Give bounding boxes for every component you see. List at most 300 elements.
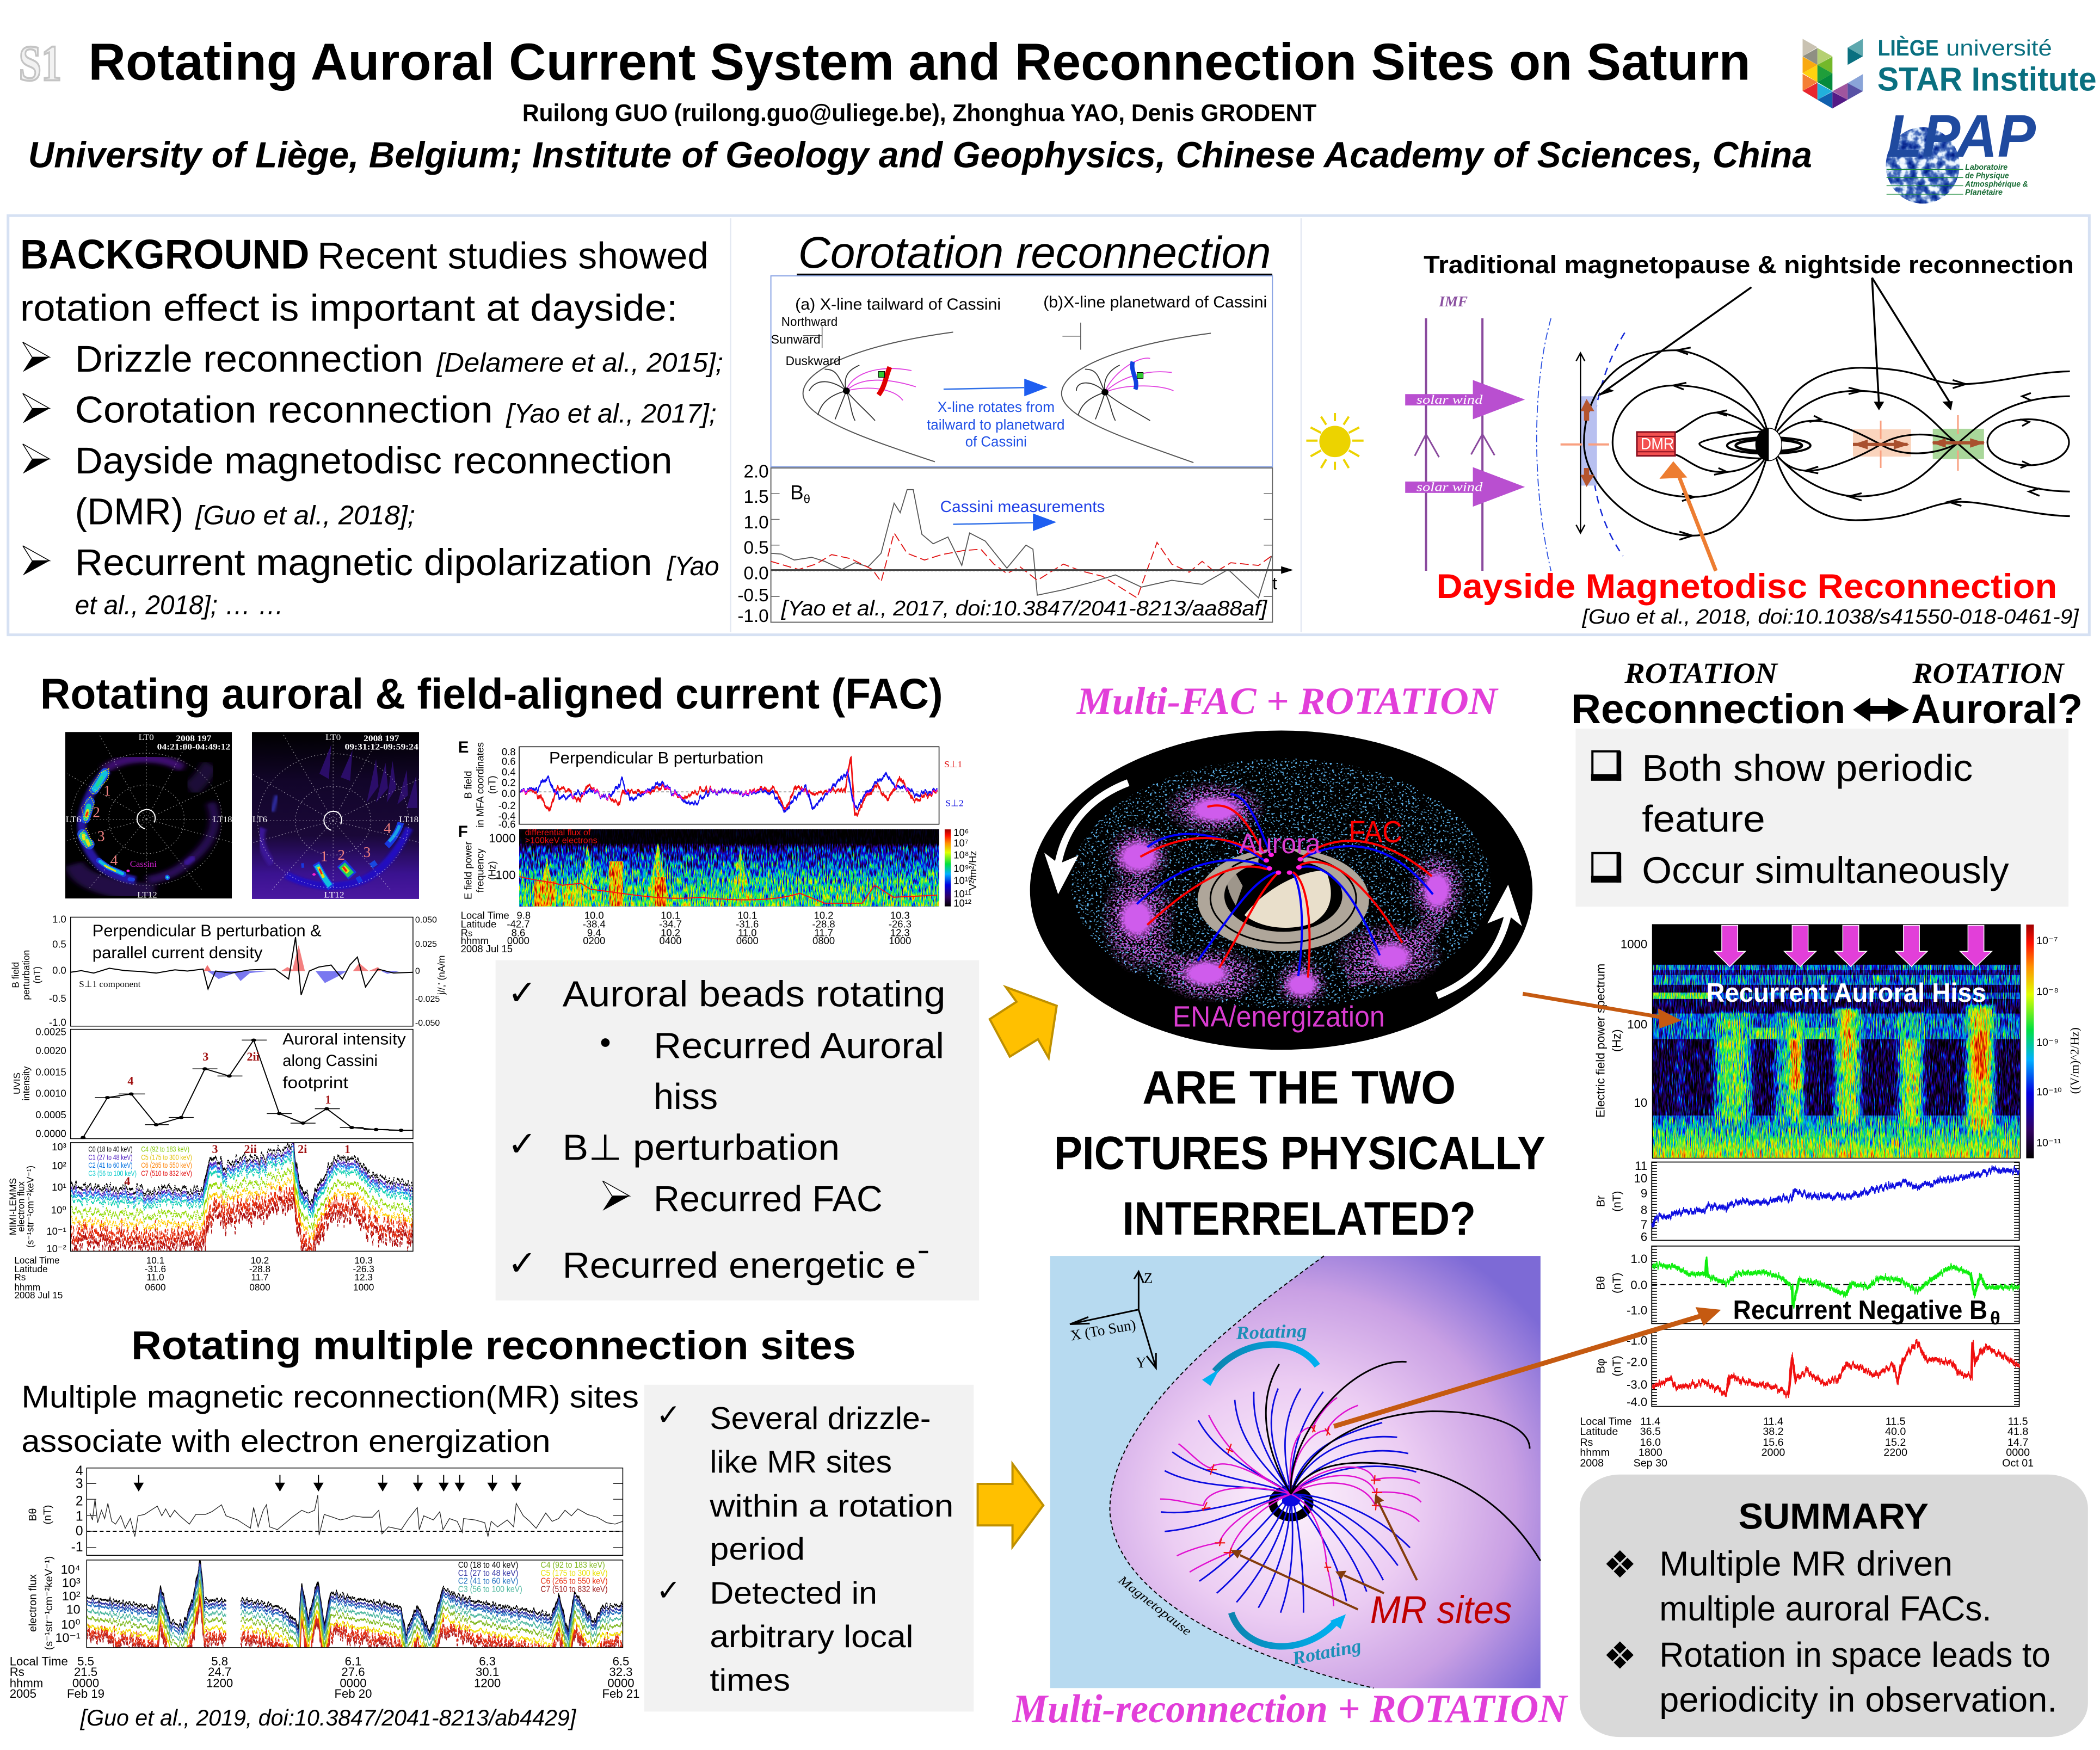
item: periodic feature: feature: [1642, 798, 1765, 840]
ephemeris table left: 10.3: [354, 1255, 373, 1266]
ticks B theta right: 1.0: [1630, 1252, 1647, 1266]
ephemeris table right: Local Time: [1580, 1416, 1632, 1428]
finding: arbitrary local times: times: [710, 1663, 790, 1698]
label: Rotating top: Rotating: [1235, 1321, 1307, 1344]
ephemeris table F: 0600: [736, 935, 759, 946]
ephemeris table lower left: 0000: [340, 1676, 367, 1690]
finding: arbitrary local times: Detected in: [710, 1576, 877, 1611]
label: Magnetopause: Magnetopause: [1115, 1573, 1194, 1638]
summary item 1: Multiple MR driven: [1659, 1544, 1953, 1583]
central question: PICTURES PHYSICALLY: [1054, 1127, 1545, 1180]
ticks Br: 6: [1641, 1230, 1647, 1243]
ticks B theta right: [1627, 1252, 1647, 1317]
sub-finding: auroral hiss: hiss: [654, 1077, 718, 1117]
diagram: multi-reconnection magnetosphere: [1050, 1256, 1541, 1688]
aurora right labels: LT6: [253, 815, 267, 824]
summary item 1: multiple auroral FACs.: [1659, 1589, 1992, 1628]
ephemeris table right: 2008: [1580, 1457, 1604, 1469]
ephemeris table F: -38.4: [583, 918, 606, 929]
chart: B phi: [1594, 1329, 2019, 1409]
ephemeris table right: 40.0: [1885, 1426, 1906, 1438]
ticks MIMI: 10⁰: [51, 1204, 66, 1216]
logo: LPAP: Planétaire: [1965, 188, 2003, 197]
colorbar labels F: 10⁹: [953, 862, 969, 874]
ephemeris table F: 10.2: [661, 927, 680, 938]
ticks UVIS: 0.0005: [35, 1109, 66, 1120]
background intro line 2: rotation effect is important at dayside:: [20, 287, 678, 329]
y label MIMI: MIMI-LEMMS: [8, 1178, 19, 1235]
aurora right bead numbers: 4: [384, 820, 391, 836]
chart: recurrent auroral hiss: [1593, 925, 2081, 1159]
ephemeris table left: 10.2: [251, 1255, 269, 1266]
legend flux: C1 (27 to 48 keV): [458, 1569, 518, 1578]
finding: drizzle-like sites: period: [710, 1532, 805, 1567]
ephemeris table left: -26.3: [353, 1264, 374, 1274]
ephemeris table lower left: 1200: [474, 1676, 501, 1690]
bullet: drizzle: [Delamere et al., 2015];: [436, 348, 723, 378]
aurora left bead numbers: 4: [110, 852, 118, 868]
y label Br: [1594, 1191, 1623, 1212]
chart: Br: [1594, 1159, 2019, 1243]
finding: energetic electrons: Recurred energetic e: [563, 1246, 916, 1286]
Cassini measurements note: Cassini measurements: [940, 498, 1105, 516]
ephemeris table right: 11.5: [2008, 1416, 2028, 1428]
ticks E: -0.6: [498, 818, 516, 830]
icon: double arrow: [1853, 698, 1909, 722]
ephemeris table F: -34.7: [659, 918, 682, 929]
peak numbers UVIS: 1: [325, 1093, 331, 1106]
panel: summary: [1580, 1475, 2088, 1737]
hiss ticks: [1621, 938, 1647, 1110]
ephemeris table right: 11.5: [1886, 1416, 1906, 1428]
finding: B perpendicular: B⊥ perturbation: [563, 1127, 840, 1168]
bullet: dayside: [23, 440, 672, 533]
ephemeris table left: Rs: [14, 1272, 26, 1283]
finding: drizzle-like sites: [656, 1398, 953, 1567]
y ticks F: 1000: [489, 831, 516, 845]
colorbar labels F: 10⁸: [953, 849, 969, 861]
heading traditional reconnection: Traditional magnetopause & nightside reconnection: [1424, 251, 2074, 279]
ticks left: -0.5: [49, 993, 66, 1004]
finding: auroral beads: ✓: [508, 973, 537, 1013]
legend MIMI: [88, 1145, 192, 1178]
component label: S⊥1 component: [79, 979, 141, 989]
finding: drizzle-like sites: within a rotation: [709, 1489, 953, 1524]
ephemeris table right: 1800: [1639, 1446, 1662, 1458]
sub-finding: FAC: Recurred FAC: [654, 1179, 883, 1219]
peak numbers UVIS: [127, 1050, 331, 1106]
ephemeris table left: Latitude: [14, 1264, 48, 1274]
ephemeris table F: 12.3: [890, 927, 910, 938]
ephemeris table right: 14.7: [2007, 1437, 2028, 1449]
legend flux: C7 (510 to 832 keV): [541, 1585, 608, 1594]
peak numbers UVIS: 2ii: [247, 1050, 260, 1063]
figure: x-line schematic: Northward: [781, 315, 837, 329]
ephemeris table F: -42.7: [507, 918, 529, 929]
bullet: dipolarization: Recurrent magnetic dipolarization: [75, 541, 652, 583]
chart: MIMI electron flux: [8, 1141, 413, 1301]
hiss y label: (Hz): [1610, 1029, 1623, 1052]
ephemeris table lower left: 21.5: [74, 1665, 97, 1679]
legend MIMI: C2 (41 to 60 keV): [88, 1161, 133, 1169]
ticks B phi: -4.0: [1627, 1395, 1647, 1409]
chart: B perturbation and current density: [10, 914, 447, 1028]
ticks right: 0: [415, 966, 420, 976]
ticks E: -0.2: [498, 800, 516, 811]
ticks B phi: -1.0: [1627, 1334, 1647, 1347]
axis ticks: 0.5: [743, 538, 769, 558]
item: simultaneous: Occur simultaneously: [1642, 849, 2009, 891]
figure: x-line schematic: [771, 276, 1272, 467]
ticks right: 0.025: [415, 940, 437, 949]
heading dayside reconnection: Dayside Magnetodisc Reconnection: [1437, 568, 2057, 606]
bullet: dipolarization: [Yao: [667, 551, 719, 581]
x-line note: tailward to planetward: [927, 416, 1065, 433]
bullet: corotation: Corotation reconnection: [75, 389, 493, 430]
flux note: differential flux of: [525, 828, 591, 837]
finding: arbitrary local times: [656, 1573, 913, 1698]
ephemeris table left: -31.6: [145, 1264, 166, 1274]
ticks flux: 10⁴: [61, 1562, 81, 1576]
ticks UVIS: 0.0020: [35, 1045, 66, 1056]
text: multiple MR sites: Multiple magnetic reconnection(MR) sites: [21, 1380, 639, 1415]
authors: Ruilong GUO (ruilong.guo@uliege.be), Zhonghua YAO, Denis GRODENT: [522, 100, 1316, 127]
hiss colorbar ticks: 10⁻¹¹: [2036, 1137, 2061, 1149]
ticks B phi: -3.0: [1627, 1378, 1647, 1391]
header: [19, 33, 2097, 204]
background intro line 1: Recent studies showed: [317, 235, 709, 276]
summary item 2: Rotation in space leads to: [1659, 1635, 2050, 1674]
peak numbers MIMI: 2i: [298, 1142, 307, 1156]
ephemeris table lower left: Feb 19: [67, 1687, 104, 1700]
label: recurrent negative B theta: Recurrent Negative B: [1733, 1295, 1987, 1325]
logo: LPAP: Laboratoire: [1965, 163, 2007, 172]
finding: arbitrary local times: ✓: [656, 1573, 681, 1607]
y label B theta: Bθ: [27, 1508, 39, 1521]
finding: drizzle-like sites: ✓: [656, 1398, 681, 1432]
peak numbers UVIS: 3: [202, 1050, 208, 1063]
heading: rotating auroral: Rotating auroral & field-aligned current (FAC): [40, 670, 943, 718]
axis ticks: -1.0: [737, 606, 769, 626]
arrow: negative B link: [1334, 1307, 1721, 1426]
peak numbers MIMI: 1: [344, 1142, 350, 1156]
label: Z axis: Z: [1144, 1270, 1153, 1286]
aurora left bead numbers: 1: [103, 782, 111, 799]
label: X to Sun: X (To Sun): [1069, 1316, 1137, 1344]
label: ENA: ENA/energization: [1173, 1000, 1385, 1033]
ephemeris table F: 10.1: [737, 909, 757, 921]
ephemeris table right: 38.2: [1763, 1426, 1784, 1438]
ROTATION left: ROTATION: [1624, 657, 1778, 689]
aurora right bead numbers: 3: [364, 844, 371, 860]
ephemeris table right: 2200: [1883, 1446, 1907, 1458]
hiss colorbar ticks: 10⁻⁸: [2036, 986, 2059, 998]
ephemeris table lower left: 27.6: [341, 1665, 365, 1679]
arrows: recurrence markers: [1714, 925, 1992, 966]
bullet: dayside: Dayside magnetodisc reconnection: [75, 440, 672, 482]
hiss ticks: 10: [1634, 1096, 1647, 1110]
sub-finding: auroral hiss: [601, 1026, 944, 1117]
aurora left bead numbers: 2: [93, 804, 100, 820]
y label B theta right: [1594, 1273, 1623, 1293]
finding: drizzle-like sites: Several drizzle-: [710, 1401, 931, 1436]
ephemeris table lower left: 30.1: [476, 1665, 499, 1679]
finding: auroral beads: Auroral beads rotating: [563, 975, 946, 1015]
central question: INTERRELATED?: [1122, 1193, 1476, 1245]
y label B theta right: Bθ: [1594, 1276, 1607, 1290]
ticks E: [498, 746, 516, 830]
ticks Br: [1634, 1159, 1647, 1243]
peak numbers UVIS: 4: [127, 1074, 133, 1088]
ticks MIMI: 10³: [52, 1141, 66, 1153]
panel: corotation reconnection: [737, 228, 1294, 626]
chart: B theta recurrent: [1594, 1246, 2019, 1329]
aurora left labels: LT0: [138, 733, 154, 742]
hiss ticks: 100: [1627, 1018, 1647, 1031]
ephemeris table left: 0800: [249, 1281, 270, 1292]
ticks B theta: -1: [71, 1540, 83, 1555]
aurora left labels: [66, 733, 232, 900]
ticks Br: 7: [1641, 1218, 1647, 1231]
ticks right: -0.050: [415, 1019, 440, 1028]
ephemeris table lower left: 6.5: [613, 1654, 629, 1668]
item: periodic feature: [1591, 747, 1973, 840]
y label B theta right: (nT): [1611, 1273, 1623, 1293]
ephemeris table left: 11.7: [251, 1272, 269, 1283]
ticks flux: 10: [66, 1603, 81, 1617]
ticks B theta: 0: [76, 1524, 83, 1539]
y axis label F: [462, 841, 498, 899]
finding: arbitrary local times: arbitrary local: [710, 1619, 913, 1654]
bullet: dipolarization: [23, 541, 719, 620]
aurora right labels: LT0: [325, 733, 341, 742]
finding: drizzle-like sites: like MR sites: [710, 1445, 892, 1480]
ticks UVIS: 0.0010: [35, 1088, 66, 1099]
panel: periodic features: [1575, 729, 2068, 907]
ephemeris table lower left: 5.8: [211, 1654, 228, 1668]
y axis label F: frequency: [474, 848, 485, 892]
item: periodic feature: Both show periodic: [1642, 747, 1973, 789]
ephemeris table right: 15.6: [1763, 1437, 1784, 1449]
bullet: drizzle: [23, 338, 723, 380]
y axis labels: [10, 950, 447, 1000]
aurora image left: [65, 732, 232, 900]
y label Br: (nT): [1611, 1191, 1623, 1212]
panel letter E: E: [458, 738, 469, 756]
ephemeris table lower left: 0000: [72, 1676, 99, 1690]
hiss colorbar ticks: 10⁻⁹: [2036, 1037, 2059, 1049]
annotation UVIS: [282, 1031, 406, 1092]
hiss colorbar ticks: [2036, 935, 2062, 1149]
ticks flux: 10³: [62, 1575, 81, 1589]
central question: [1054, 1062, 1545, 1245]
y axis labels: perturbation: [21, 950, 32, 1000]
aurora right labels: 09:31:12-09:59:24: [344, 743, 418, 752]
ticks B theta: 3: [76, 1476, 83, 1491]
ticks B theta: 2: [76, 1494, 83, 1508]
ephemeris table F: 10.1: [661, 909, 680, 921]
aurora left labels: 04:21:00-04:49:12: [157, 743, 230, 752]
STAR Institute label: STAR Institute: [1877, 61, 2097, 98]
ephemeris table right: Rs: [1580, 1437, 1593, 1449]
ticks B theta right: 0.0: [1630, 1278, 1647, 1292]
ticks flux: 10²: [62, 1589, 81, 1603]
aurora left labels: LT12: [137, 891, 157, 900]
y label MIMI: (s⁻¹str⁻¹cm⁻²keV⁻¹): [25, 1166, 36, 1248]
ephemeris table lower left: 0000: [607, 1676, 635, 1690]
ticks E: 0.8: [502, 746, 516, 757]
central question: ARE THE TWO: [1142, 1062, 1456, 1114]
Liège label: LIÈGE: [1877, 35, 1939, 60]
legend flux: C3 (56 to 100 keV): [458, 1585, 522, 1594]
reconnection word: Reconnection: [1571, 686, 1845, 732]
label: Rotating bottom: Rotating: [1290, 1635, 1363, 1669]
chart: perpendicular B perturbation E: [458, 738, 964, 830]
ephemeris table right: 2000: [1762, 1446, 1785, 1458]
ticks B phi: [1627, 1334, 1647, 1409]
arrow: upper gold: [990, 987, 1057, 1058]
legend flux: [458, 1561, 608, 1594]
ephemeris table right: Sep 30: [1634, 1457, 1667, 1469]
y axis label F: (Hz): [486, 861, 498, 880]
ephemeris table lower left: Rs: [10, 1665, 24, 1679]
ticks flux: 10⁻¹: [56, 1630, 81, 1644]
hiss colorbar ticks: 10⁻¹⁰: [2036, 1086, 2062, 1098]
solar wind labels: solar wind: [1417, 393, 1483, 407]
aurora left labels: LT18: [213, 815, 232, 824]
solar wind and magnetic field lines: [1405, 278, 2070, 571]
annotation E: Perpendicular B perturbation: [549, 748, 763, 767]
corotation heading: Corotation reconnection: [798, 228, 1271, 278]
annotation: Perpendicular B perturbation &: [93, 921, 322, 940]
ephemeris table F: 11.0: [738, 927, 757, 938]
y label flux: (s⁻¹str⁻¹cm⁻²keV⁻¹): [43, 1556, 55, 1650]
ticks B theta: [71, 1464, 83, 1555]
ephemeris table F: 0000: [507, 935, 529, 946]
axis ticks: [737, 461, 769, 626]
annotation UVIS: footprint: [282, 1074, 348, 1092]
y label MIMI: electron flux: [15, 1181, 26, 1232]
DMR label: DMR: [1641, 435, 1674, 453]
chart: B theta with reconnection arrows: [27, 1464, 623, 1555]
ticks left: 0.0: [52, 964, 66, 976]
ticks right: 0.050: [415, 916, 437, 925]
figure: x-line schematic: Sunward: [771, 332, 821, 346]
y label B phi: [1594, 1355, 1623, 1377]
y ticks F: [489, 831, 516, 882]
ephemeris table F: -28.8: [812, 918, 835, 929]
bullet: dayside: (DMR): [75, 491, 183, 533]
ephemeris table left: 10.1: [146, 1255, 164, 1266]
logo: LPAP: de Physique: [1965, 171, 2009, 180]
ticks left: 1.0: [52, 914, 66, 925]
ticks E: -0.4: [498, 810, 516, 822]
ephemeris table F: 10.2: [814, 909, 834, 921]
x-line note: of Cassini: [965, 433, 1027, 449]
ephemeris table F: 0200: [583, 935, 605, 946]
colorbar labels F: [953, 827, 978, 909]
panel letter F: F: [458, 823, 468, 841]
ephemeris table right: 11.4: [1763, 1416, 1783, 1428]
y label B theta: (nT): [42, 1505, 54, 1525]
ticks E: 0.4: [502, 766, 516, 778]
subscript theta: θ: [1990, 1308, 2000, 1329]
auroral word: Auroral?: [1911, 686, 2083, 732]
ticks E: 0.2: [502, 777, 516, 788]
ephemeris table lower left: 24.7: [208, 1665, 231, 1679]
ticks B theta: 4: [76, 1464, 83, 1478]
aurora right labels: LT18: [399, 815, 418, 824]
aurora image right: [252, 732, 419, 900]
affiliations: University of Liège, Belgium; Institute of Geology and Geophysics, Chinese Academy of Sciences, China: [28, 135, 1812, 176]
annotation: [93, 921, 322, 962]
y axis labels: (nT): [32, 966, 42, 984]
logo: LPAP: LPAP: [1887, 103, 2036, 170]
ticks UVIS: 0.0000: [35, 1128, 66, 1139]
legend MIMI: C3 (56 to 100 keV): [88, 1169, 137, 1178]
ephemeris table left: 0600: [145, 1281, 166, 1292]
annotation UVIS: Auroral intensity: [282, 1031, 406, 1049]
bullet: corotation: [Yao et al., 2017];: [506, 398, 717, 428]
axis ticks: 1.0: [743, 513, 769, 533]
bullet: dayside: [Guo et al., 2018];: [195, 501, 415, 531]
axis ticks: -0.5: [737, 586, 769, 606]
ephemeris table F: 9.4: [587, 927, 601, 938]
ephemeris table left: 12.3: [354, 1272, 373, 1283]
legend flux: C4 (92 to 183 keV): [541, 1561, 605, 1570]
axis ticks: 2.0: [743, 461, 769, 482]
hiss y label: Electric field power spectrum: [1593, 964, 1607, 1118]
legend MIMI: C6 (265 to 550 keV): [141, 1161, 192, 1169]
legend MIMI: C7 (510 to 832 keV): [141, 1169, 192, 1178]
ephemeris table F: 8.6: [512, 927, 525, 938]
axis ticks: 1.5: [743, 487, 769, 507]
summary item 2: [1603, 1635, 2057, 1719]
text: multiple MR sites: [21, 1380, 639, 1459]
ticks UVIS: 0.0015: [35, 1066, 66, 1077]
ephemeris table right: 41.8: [2007, 1426, 2028, 1438]
ticks B theta: 1: [76, 1509, 83, 1524]
legend MIMI: C1 (27 to 48 keV): [88, 1153, 133, 1161]
finding: energetic electrons: ✓: [508, 1243, 537, 1284]
legend MIMI: C0 (18 to 40 keV): [88, 1145, 133, 1154]
aurora left labels: 2008 197: [176, 734, 211, 743]
ephemeris table lower left: hhmm: [10, 1676, 43, 1690]
title: Rotating Auroral Current System and Reconnection Sites on Saturn: [88, 33, 1751, 91]
hiss colorbar label: ((V/m)^2/Hz): [2068, 1027, 2081, 1094]
ephemeris table lower left: 2005: [10, 1687, 36, 1700]
ephemeris table F: 11.7: [814, 927, 833, 938]
finding: B perpendicular: ✓: [508, 1124, 537, 1164]
ephemeris table F: hhmm: [461, 935, 489, 946]
ephemeris table left: [14, 1255, 374, 1301]
axis ticks: 0.0: [743, 563, 769, 583]
panel: background: [20, 231, 723, 620]
y label UVIS: UVIS: [11, 1073, 22, 1094]
y label flux: [27, 1556, 55, 1650]
ephemeris table F: [461, 909, 912, 954]
ephemeris table F: -31.6: [736, 918, 759, 929]
heading: rotating multiple reconnection sites: Rotating multiple reconnection sites: [131, 1323, 856, 1368]
annotation: parallel current density: [93, 943, 263, 962]
logo: LPAP: Atmosphérique &: [1964, 180, 2028, 189]
legend flux: C5 (175 to 300 keV): [541, 1569, 608, 1578]
ephemeris table right: 15.2: [1885, 1437, 1906, 1449]
panel: magnetosphere diagram: [1306, 251, 2079, 628]
ephemeris table right: [1580, 1416, 2034, 1469]
legend E: [944, 759, 964, 809]
ticks Br: 10: [1634, 1172, 1647, 1185]
